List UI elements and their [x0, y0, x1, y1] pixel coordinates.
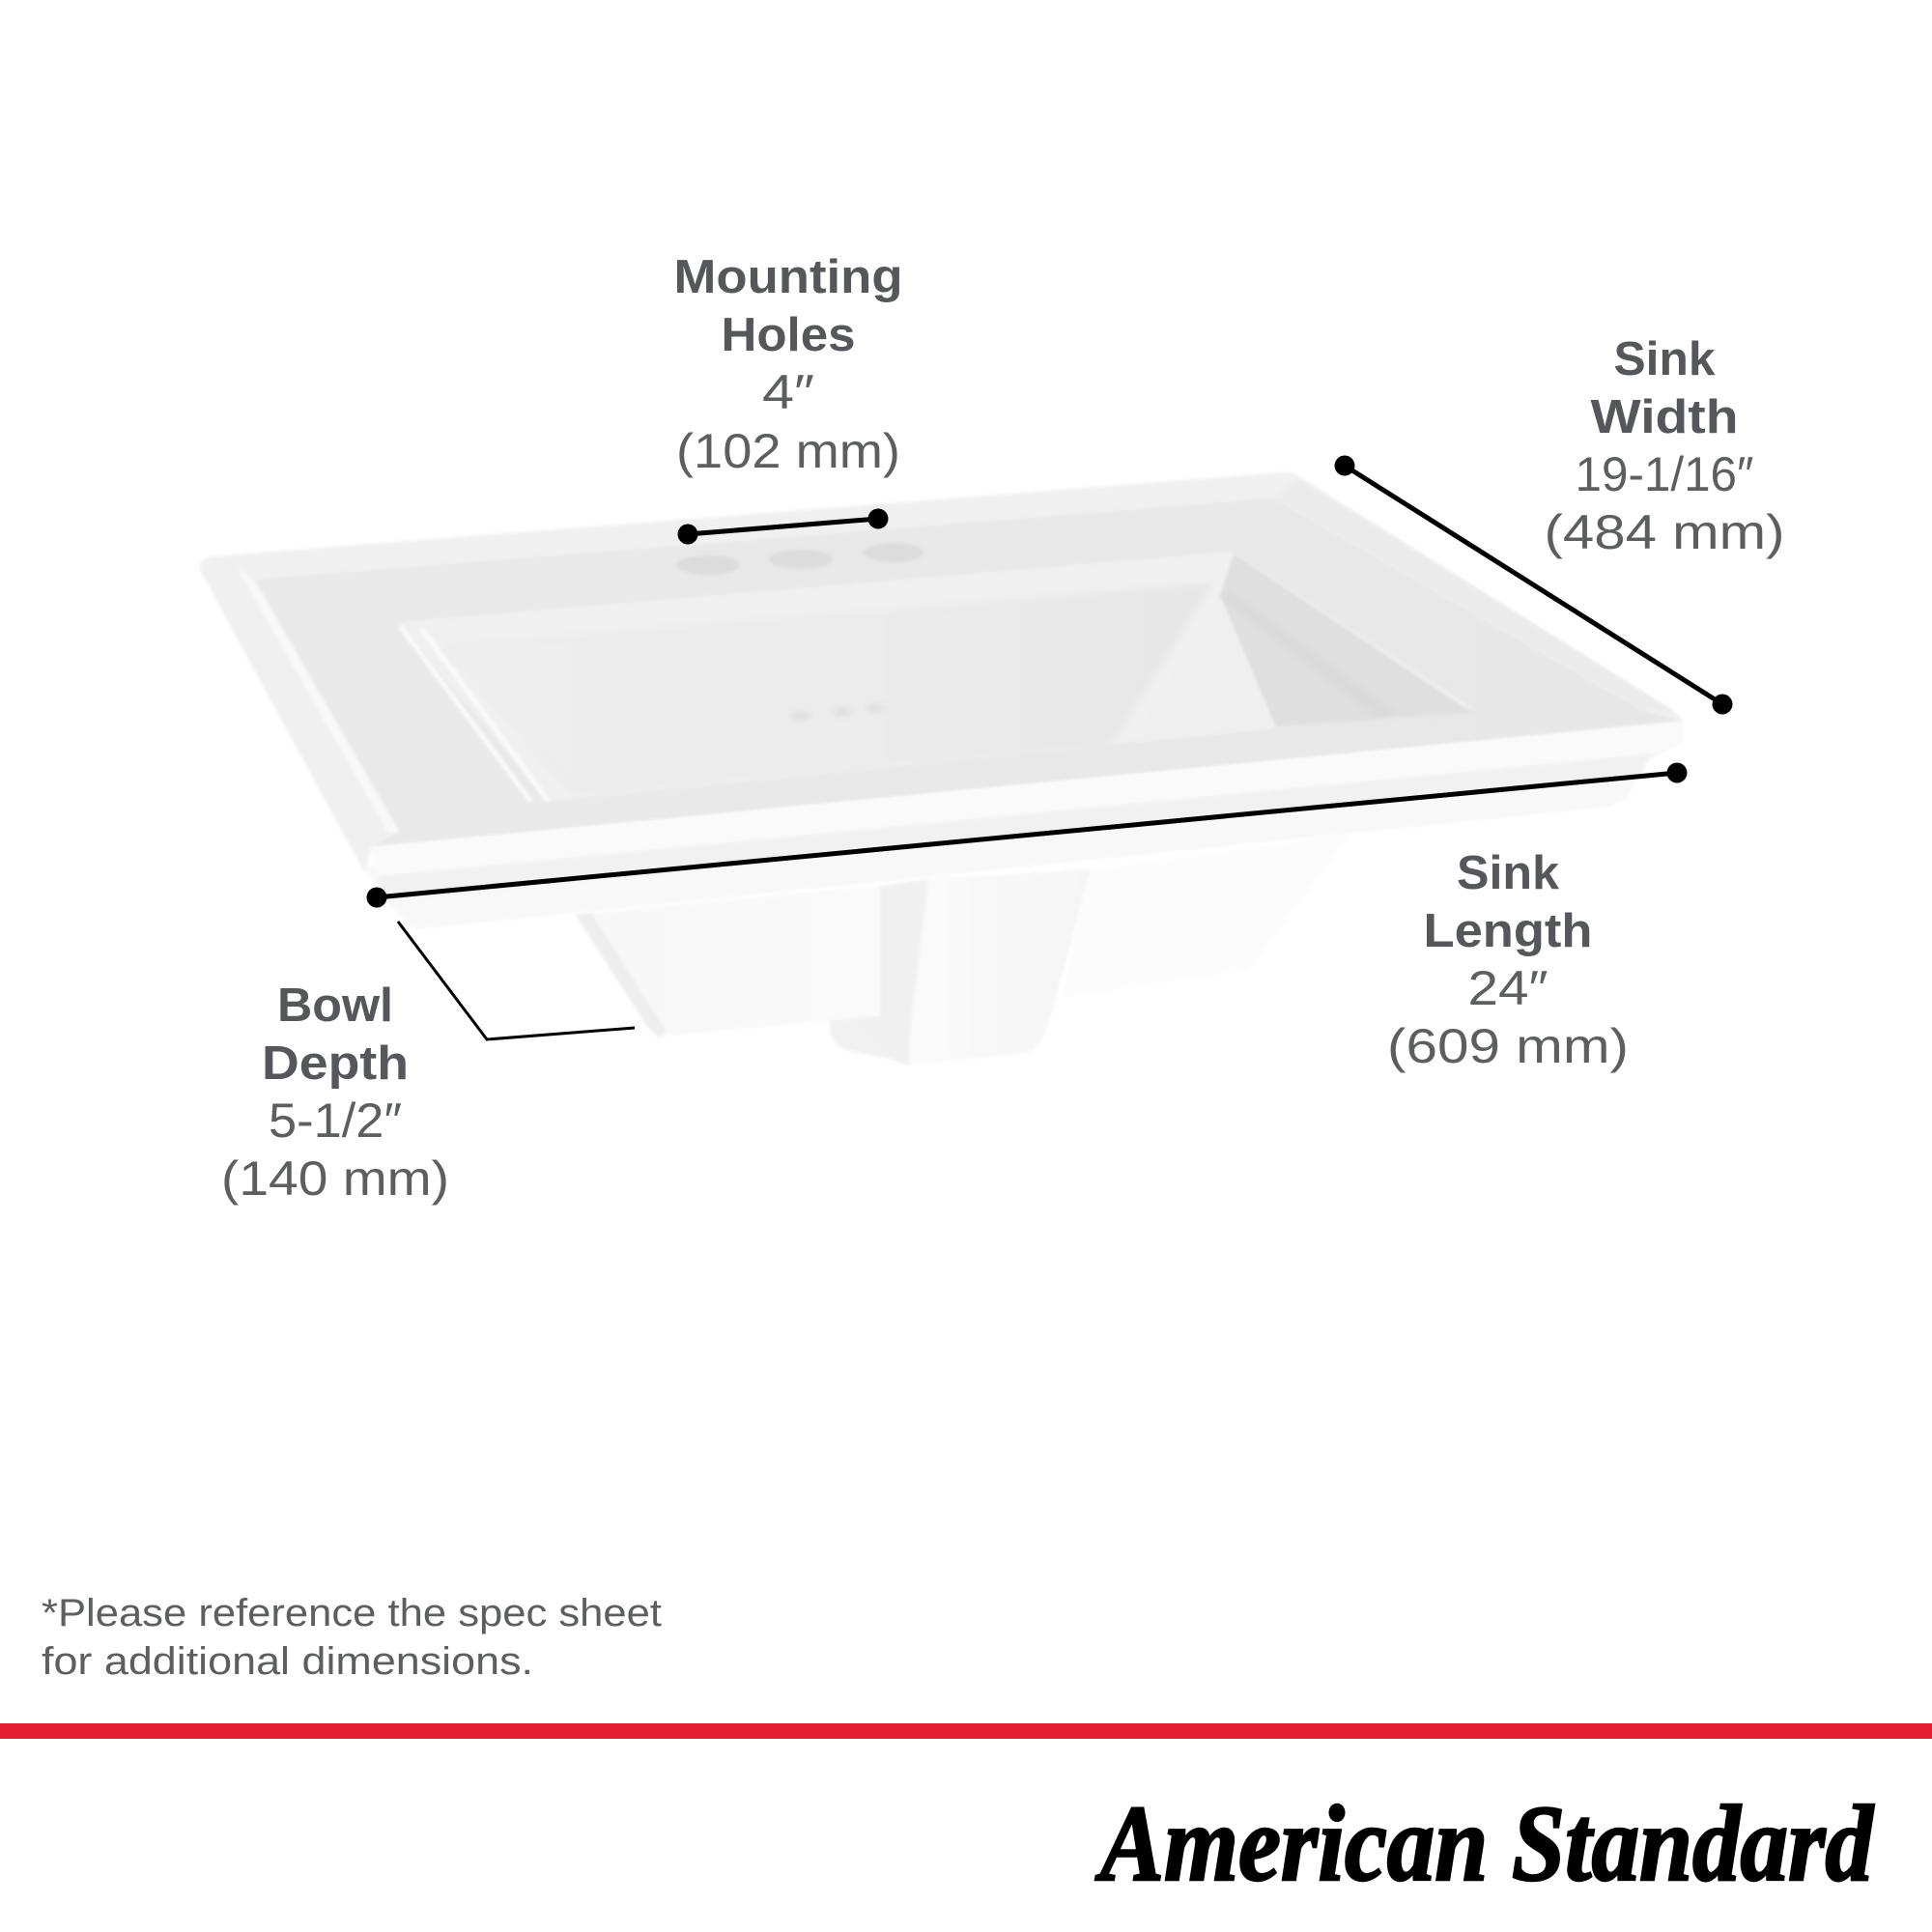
label: sink width: Width [1590, 391, 1739, 443]
label: mounting holes: Mounting [674, 251, 902, 303]
dimension line: mounting holes [678, 508, 889, 545]
label: sink length: 24″ [1468, 961, 1548, 1015]
label: bowl depth: (140 mm) [221, 1151, 449, 1206]
sink drain stub [829, 1014, 918, 1060]
label: bowl depth [221, 980, 449, 1206]
label: sink width: 19-1/16″ [1575, 447, 1754, 501]
label: sink width: (484 mm) [1544, 505, 1785, 559]
sink illustration [200, 472, 1682, 1065]
red divider bar [0, 1723, 1932, 1739]
front rim white band [372, 722, 1682, 876]
basin right slope streak [1220, 591, 1396, 717]
label: bowl depth: Bowl [277, 980, 393, 1032]
bowl underside shadow edge [576, 913, 667, 1037]
bowl pier shadow column [857, 879, 928, 1065]
label: mounting holes: Holes [721, 309, 856, 361]
deck [254, 498, 1682, 847]
footnote: *Please reference the spec sheet [42, 1592, 662, 1634]
bowl centre pier [894, 869, 1091, 1065]
label: bowl depth: Depth [262, 1037, 409, 1090]
basin [397, 552, 1472, 801]
label: bowl depth: 5-1/2″ [269, 1094, 402, 1148]
label: sink width [1544, 333, 1785, 559]
left raised line [237, 567, 400, 833]
label: sink length: (609 mm) [1387, 1019, 1629, 1073]
front rim below line [362, 720, 1682, 928]
bowl underside left [576, 886, 880, 1037]
basin right slope light [1130, 597, 1275, 742]
label: sink length: Sink [1457, 847, 1560, 899]
footnote [42, 1592, 662, 1683]
label: mounting holes [674, 251, 902, 478]
dimension line: bowl depth [398, 922, 635, 1039]
front rim shaded step [377, 752, 1654, 900]
mounting holes [676, 543, 923, 575]
label: sink length [1387, 847, 1629, 1073]
top surface [200, 472, 1682, 872]
label: mounting holes: (102 mm) [676, 424, 900, 478]
right deck [1274, 480, 1673, 711]
basin right slope dark [1220, 554, 1471, 727]
dimension line: sink width [1335, 456, 1733, 715]
basin left edge highlights [400, 626, 549, 802]
bowl underside right [1061, 835, 1350, 998]
footnote: for additional dimensions. [42, 1640, 533, 1683]
basin floor drain marks [791, 704, 885, 720]
dimension line: sink length [367, 763, 1687, 908]
label: mounting holes: 4″ [762, 365, 814, 419]
label: sink width: Sink [1613, 333, 1716, 385]
basin floor [438, 583, 1212, 797]
label: sink length: Length [1424, 905, 1592, 957]
